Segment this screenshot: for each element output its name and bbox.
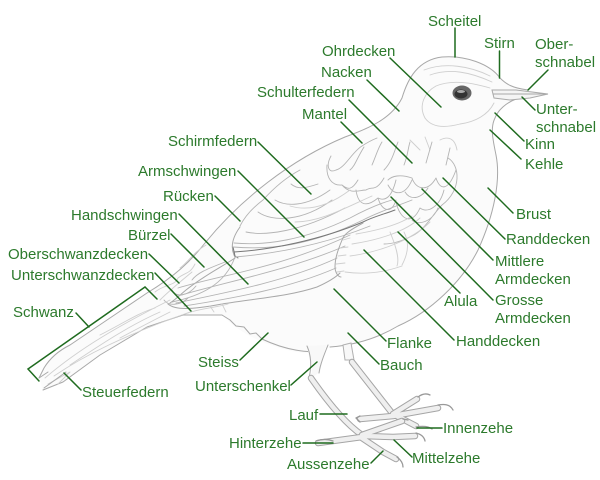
eye xyxy=(452,86,472,100)
label: Mittelzehe: Mittelzehe xyxy=(412,450,480,467)
leader line: Oberschwanzdecken xyxy=(149,254,179,283)
face lines xyxy=(422,82,490,118)
beak xyxy=(492,90,548,100)
leader line: Ohrdecken xyxy=(390,58,441,107)
leader line: Mittlere Armdecken xyxy=(422,189,493,260)
leader line: Schirmfedern xyxy=(258,142,311,194)
greater wing coverts xyxy=(384,158,457,244)
leader line: Handdecken xyxy=(364,250,454,340)
undertail outline xyxy=(43,315,322,390)
label: Aussenzehe: Aussenzehe xyxy=(287,456,370,473)
label: Oberschnabel: Ober- xyxy=(535,36,573,53)
label: Unterschnabel: Unter- xyxy=(536,101,578,118)
bird illustration xyxy=(39,57,548,467)
label: Randdecken: Randdecken xyxy=(506,231,590,248)
label: Scheitel: Scheitel xyxy=(428,13,481,30)
alula and primary coverts xyxy=(335,223,363,277)
body outline chest and belly xyxy=(330,99,516,347)
label: Steuerfedern: Steuerfedern xyxy=(82,384,169,401)
leader line: Armschwingen xyxy=(238,171,304,237)
leader line: Steuerfedern xyxy=(64,373,81,390)
label: Schwanz: Schwanz xyxy=(13,304,74,321)
right toes xyxy=(360,399,438,426)
label: Handdecken: Handdecken xyxy=(456,333,540,350)
thigh left xyxy=(307,345,326,380)
leader line: Scheitel xyxy=(454,28,456,57)
label: Hinterzehe: Hinterzehe xyxy=(229,435,302,452)
left foot xyxy=(311,378,425,467)
label: Stirn: Stirn xyxy=(484,35,515,52)
leader line: Kinn xyxy=(495,113,524,141)
rump feathers xyxy=(155,245,206,300)
leader line: Steiss xyxy=(240,333,268,360)
upper wing coverts xyxy=(328,138,450,171)
label: Handschwingen: Handschwingen xyxy=(71,207,178,224)
label: Innenzehe: Innenzehe xyxy=(443,420,513,437)
label: Ohrdecken: Ohrdecken xyxy=(322,43,395,60)
leader line: Lauf xyxy=(320,413,347,415)
label: Ruecken: Rücken xyxy=(163,188,214,205)
leader line: Innenzehe xyxy=(417,427,442,429)
leader line: Stirn xyxy=(498,51,500,78)
label: Flanke: Flanke xyxy=(387,335,432,352)
leader line: Bauch xyxy=(348,333,379,364)
leader line: Randdecken xyxy=(443,178,505,239)
leader line: Schulterfedern xyxy=(349,100,412,163)
right tarsus xyxy=(352,362,392,413)
right claws xyxy=(356,394,453,429)
label: Unterschenkel: Unterschenkel xyxy=(195,378,291,395)
label: Grosse Armdecken: Grosse xyxy=(495,292,543,309)
leader line: Nacken xyxy=(367,80,399,111)
middle wing coverts xyxy=(327,165,456,210)
label: Unterschnabel: schnabel xyxy=(536,119,596,136)
leader line: Schwanz xyxy=(76,313,89,327)
leader line: Alula xyxy=(398,232,460,293)
tail feathers xyxy=(45,300,190,384)
label: Steiss: Steiss xyxy=(198,354,239,371)
label: Unterschwanzdecken: Unterschwanzdecken xyxy=(11,267,154,284)
undertail coverts xyxy=(185,304,228,314)
leader line: Mittelzehe xyxy=(394,440,412,457)
leader line: Unterschnabel xyxy=(522,97,535,110)
label: Alula: Alula xyxy=(444,293,478,310)
tertials xyxy=(240,170,345,233)
label: Kehle: Kehle xyxy=(525,156,563,173)
leader line: Hinterzehe xyxy=(303,442,333,444)
label: Buerzel: Bürzel xyxy=(128,227,171,244)
label: Mantel: Mantel xyxy=(302,106,347,123)
leader line: Brust xyxy=(488,188,513,213)
label: Oberschnabel: schnabel xyxy=(535,54,595,71)
leader line: Grosse Armdecken xyxy=(391,197,493,300)
label: Oberschwanzdecken: Oberschwanzdecken xyxy=(8,246,148,263)
primaries xyxy=(172,257,235,302)
label: Grosse Armdecken: Armdecken xyxy=(495,310,571,327)
bird body xyxy=(39,57,548,390)
label: Brust: Brust xyxy=(516,206,552,223)
leader line: Flanke xyxy=(334,289,386,341)
leader line: Aussenzehe xyxy=(371,451,383,463)
leader line: Buerzel xyxy=(171,234,204,267)
label: Mittlere Armdecken: Mittlere xyxy=(495,253,544,270)
body outline back and head xyxy=(39,57,528,378)
left tarsus xyxy=(311,378,362,435)
left toes xyxy=(318,421,415,459)
label: Schirmfedern: Schirmfedern xyxy=(168,133,257,150)
leader line: Handschwingen xyxy=(179,214,248,284)
label: Lauf: Lauf xyxy=(289,407,319,424)
leader line: Mantel xyxy=(341,122,362,143)
label: Kinn: Kinn xyxy=(525,136,555,153)
secondaries xyxy=(232,227,240,257)
label: Schulterfedern: Schulterfedern xyxy=(257,84,355,101)
label: Bauch: Bauch xyxy=(380,357,423,374)
bracket: Schwanz xyxy=(28,287,157,381)
leader line: Ruecken xyxy=(215,196,240,221)
label: Armschwingen: Armschwingen xyxy=(138,163,236,180)
thigh right xyxy=(343,343,354,360)
leader line: Kehle xyxy=(490,130,521,159)
leader line: Oberschnabel xyxy=(528,70,548,90)
label: Nacken: Nacken xyxy=(321,64,372,81)
leader line: Unterschwanzdecken xyxy=(155,273,191,311)
left claws xyxy=(316,419,425,467)
leader line: Unterschenkel xyxy=(291,362,317,385)
right foot xyxy=(352,362,453,429)
label: Mittlere Armdecken: Armdecken xyxy=(495,271,571,288)
